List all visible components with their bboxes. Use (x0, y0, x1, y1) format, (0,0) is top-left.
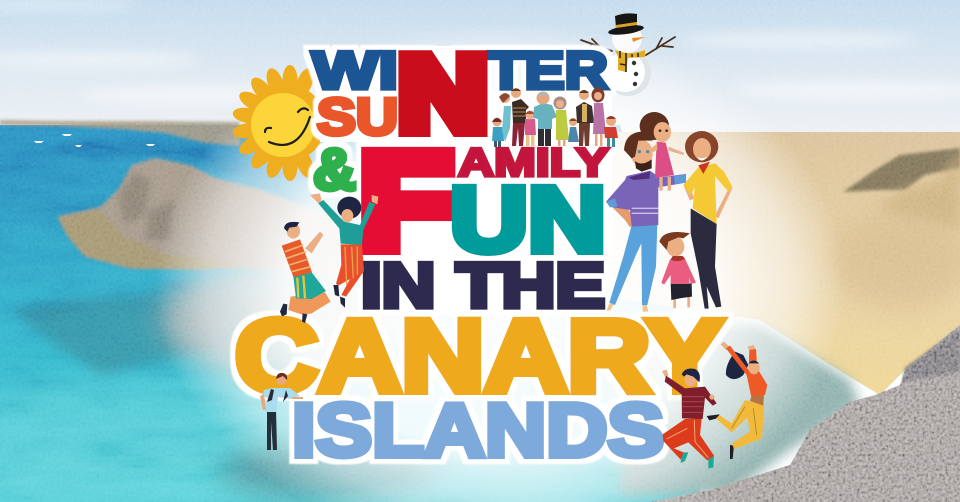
heading: SU: SU (317, 88, 398, 146)
heading: AMILY: AMILY (458, 141, 609, 185)
figure: small girl in blue (568, 118, 579, 142)
figure: mother (683, 131, 733, 309)
white backing behind lettering (320, 46, 612, 315)
icon: sun (232, 65, 326, 181)
heading: ISLANDS: ISLANDS (292, 389, 664, 473)
grey shallows under the lettering (160, 265, 420, 375)
reef bottom (220, 442, 440, 498)
sea streak texture (0, 125, 620, 502)
heading: big F: F (360, 127, 452, 276)
illustration: jumping boy in maroon (662, 368, 717, 468)
pebble texture (640, 320, 960, 502)
submerged reef (12, 287, 230, 375)
figure: father (606, 132, 686, 312)
ridge shadow (880, 150, 960, 230)
heading: TER: TER (488, 42, 608, 101)
heading: CANARY: CANARY (235, 299, 723, 413)
figure: small child left (492, 118, 504, 147)
dark rock top (903, 328, 960, 382)
sea shallows (0, 385, 320, 502)
illustration: jumping boy with thumbs up (280, 222, 331, 323)
figure: mother in mauve (592, 88, 606, 146)
lagoon (620, 320, 860, 495)
heading: ampersand: & (313, 138, 356, 202)
figure: grandfather (533, 92, 557, 146)
figure: boy (659, 232, 696, 308)
figure: girl on shoulders (640, 112, 684, 191)
figure: man in brown (511, 88, 529, 146)
heading: IN THE: IN THE (361, 251, 605, 321)
cliff (58, 158, 340, 275)
figure: woman in teal (499, 93, 511, 142)
heading: UN: UN (450, 169, 606, 271)
cliff shading (118, 172, 175, 240)
title lettering (235, 35, 723, 473)
illustration: jumping girl in teal (310, 193, 378, 308)
figure: grandmother (554, 96, 569, 146)
illustration: family of four (606, 112, 733, 312)
clouds (0, 1, 960, 104)
sailing boats (34, 134, 155, 147)
dark ridge (843, 148, 960, 192)
sky (0, 0, 960, 135)
far headland (0, 120, 240, 146)
figure: girl in pink (525, 110, 536, 146)
illustration: extended family group (492, 88, 618, 147)
cliff shore (58, 210, 240, 270)
sea (0, 125, 700, 502)
illustration: jumping girl in yellow (707, 342, 767, 459)
heading: WI: WI (312, 42, 398, 101)
dune shading (830, 210, 960, 310)
illustration: man with backpack (260, 373, 303, 450)
figure: father in dark jacket (576, 90, 594, 146)
icon: snowman (581, 13, 675, 96)
figure: boy in red (604, 116, 618, 147)
beach (560, 132, 960, 395)
pebble rocks (650, 325, 960, 502)
heading: big N: N (398, 35, 488, 153)
